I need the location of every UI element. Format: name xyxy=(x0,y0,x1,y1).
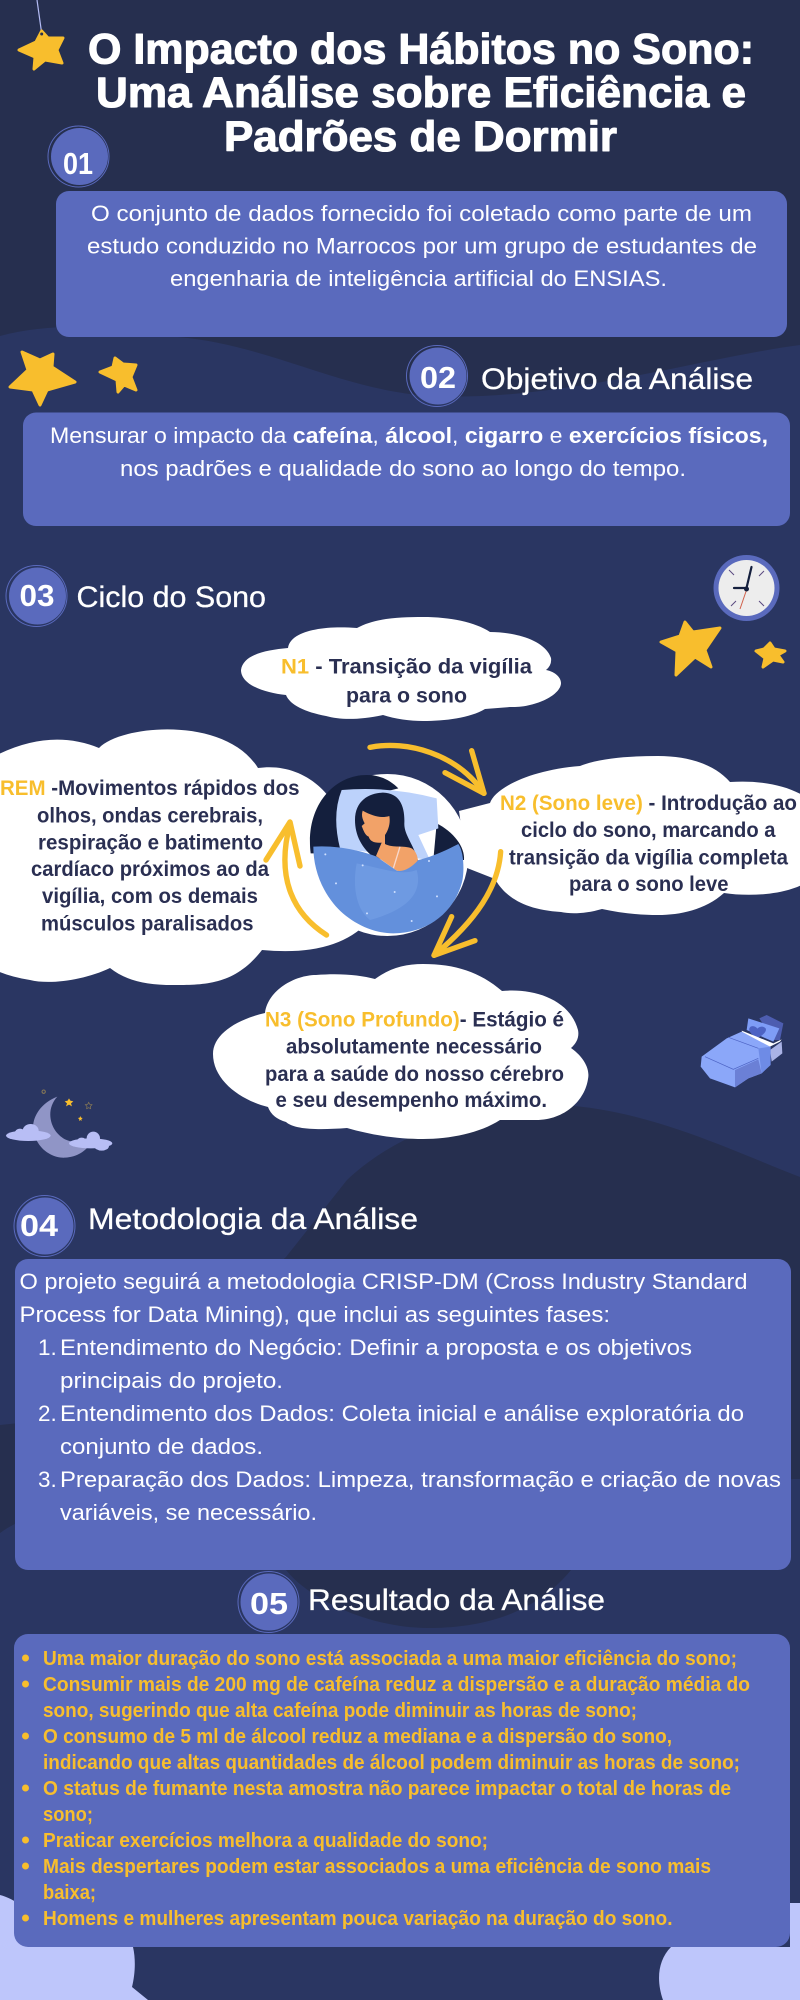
heading: objetivo xyxy=(406,346,753,406)
panel: resultado: O consumo de 5 ml de álcool reduz a mediana e a dispersão do sono, xyxy=(43,1726,672,1748)
panel: metodologia: 3. xyxy=(38,1467,57,1492)
icon: moon and clouds xyxy=(6,1090,112,1158)
panel: resultado: sono, sugerindo que alta cafeína pode diminuir as horas de sono; xyxy=(43,1700,637,1722)
illustration: sleeping woman xyxy=(306,774,468,936)
panel: intro: estudo conduzido no Marrocos por um grupo de estudantes de xyxy=(87,234,757,258)
panel: resultado: baixa; xyxy=(43,1882,96,1904)
panel: metodologia: principais do projeto. xyxy=(60,1368,283,1393)
panel: resultado: O status de fumante nesta amostra não parece impactar o total de horas de xyxy=(43,1778,731,1800)
panel: objetivo xyxy=(23,412,790,526)
heading: ciclo do sono: Ciclo do Sono xyxy=(76,581,266,614)
number badge 01 xyxy=(48,126,109,187)
title: Padrões de Dormir xyxy=(224,113,617,161)
icon: stars left xyxy=(10,352,136,405)
panel: metodologia: Preparação dos Dados: Limpeza, transformação e criação de novas xyxy=(60,1467,781,1492)
arrow: N2 to N3 xyxy=(434,852,501,955)
cloud: REM: músculos paralisados xyxy=(41,912,254,936)
cloud: REM: respiração e batimento xyxy=(38,832,263,854)
heading: resultado: 05 xyxy=(250,1586,288,1621)
panel: resultado: Uma maior duração do sono está associada a uma maior eficiência do sono; xyxy=(43,1648,737,1670)
heading: metodologia xyxy=(14,1196,418,1256)
cloud: N1: para o sono xyxy=(346,684,467,708)
panel: metodologia: conjunto de dados. xyxy=(60,1434,263,1459)
title: Uma Análise sobre Eficiência e xyxy=(96,69,746,117)
heading: metodologia: 04 xyxy=(20,1208,59,1243)
icon: hanging star xyxy=(19,0,63,69)
panel: objetivo: nos padrões e qualidade do sono ao longo do tempo. xyxy=(120,456,686,481)
cloud: N3: absolutamente necessário xyxy=(286,1036,542,1058)
heading: objetivo: 02 xyxy=(420,360,456,395)
panel: metodologia: Entendimento dos Dados: Coleta inicial e análise exploratória do xyxy=(60,1401,744,1426)
cloud: N3 xyxy=(213,964,588,1139)
icon: stars right xyxy=(661,622,785,675)
panel: resultado: Homens e mulheres apresentam pouca variação na duração do sono. xyxy=(43,1908,672,1930)
panel: intro xyxy=(56,191,787,337)
panel: metodologia xyxy=(15,1259,791,1570)
title: O Impacto dos Hábitos no Sono: xyxy=(88,26,754,74)
cloud: N3: e seu desempenho máximo. xyxy=(276,1089,547,1112)
panel: objetivo: Mensurar o impacto da cafeína, álcool, cigarro e exercícios físicos, xyxy=(50,423,768,448)
heading: metodologia: Metodologia da Análise xyxy=(88,1203,418,1236)
icon: bed xyxy=(701,1015,783,1087)
cloud: REM: cardíaco próximos ao da xyxy=(31,858,269,881)
number badge 01: 01 xyxy=(63,146,93,181)
arrow: N3 to REM xyxy=(266,822,326,935)
icon: clock xyxy=(714,555,780,621)
heading: ciclo do sono xyxy=(6,566,266,626)
cloud: N2: transição da vigília completa xyxy=(509,846,788,870)
panel: metodologia: variáveis, se necessário. xyxy=(60,1500,317,1525)
cloud: N2: para o sono leve xyxy=(569,873,728,896)
panel: metodologia: 2. xyxy=(38,1401,57,1426)
cloud: N3: N3 (Sono Profundo)- Estágio é xyxy=(265,1008,564,1032)
cloud: N2: ciclo do sono, marcando a xyxy=(521,819,776,842)
cloud: N3: para a saúde do nosso cérebro xyxy=(265,1063,564,1086)
heading: objetivo: Objetivo da Análise xyxy=(481,363,753,396)
panel: metodologia: 1. xyxy=(38,1335,57,1360)
panel: resultado xyxy=(14,1634,790,1947)
panel: resultado: Mais despertares podem estar associados a uma eficiência de sono mais xyxy=(43,1856,711,1878)
arrow: N1 to N2 xyxy=(370,745,484,793)
heading: ciclo do sono: 03 xyxy=(20,578,54,613)
cloud: REM: vigília, com os demais xyxy=(42,885,258,908)
panel: resultado: Praticar exercícios melhora a qualidade do sono; xyxy=(43,1830,488,1852)
cloud: N1 xyxy=(241,617,561,721)
heading: resultado xyxy=(238,1572,605,1632)
cloud: N2: N2 (Sono leve) - Introdução ao xyxy=(500,792,797,815)
panel: metodologia: Process for Data Mining), que inclui as seguintes fases: xyxy=(20,1302,610,1327)
panel: resultado: Consumir mais de 200 mg de cafeína reduz a dispersão e a duração média do xyxy=(43,1674,750,1696)
panel: resultado: indicando que altas quantidades de álcool podem diminuir as horas de sono; xyxy=(43,1752,740,1774)
title xyxy=(88,26,754,161)
cloud: REM: olhos, ondas cerebrais, xyxy=(37,804,263,828)
panel: intro: engenharia de inteligência artificial do ENSIAS. xyxy=(170,266,667,291)
heading: resultado: Resultado da Análise xyxy=(308,1584,605,1617)
cloud: N2 xyxy=(459,756,800,915)
panel: metodologia: Entendimento do Negócio: Definir a proposta e os objetivos xyxy=(60,1335,692,1360)
cloud: REM xyxy=(0,729,368,985)
panel: intro: O conjunto de dados fornecido foi coletado como parte de um xyxy=(91,201,752,226)
cloud: N1: N1 - Transição da vigília xyxy=(281,656,532,678)
panel: metodologia: O projeto seguirá a metodologia CRISP-DM (Cross Industry Standard xyxy=(20,1269,748,1294)
panel: resultado: sono; xyxy=(43,1804,93,1826)
cloud: REM: REM -Movimentos rápidos dos xyxy=(0,777,300,800)
